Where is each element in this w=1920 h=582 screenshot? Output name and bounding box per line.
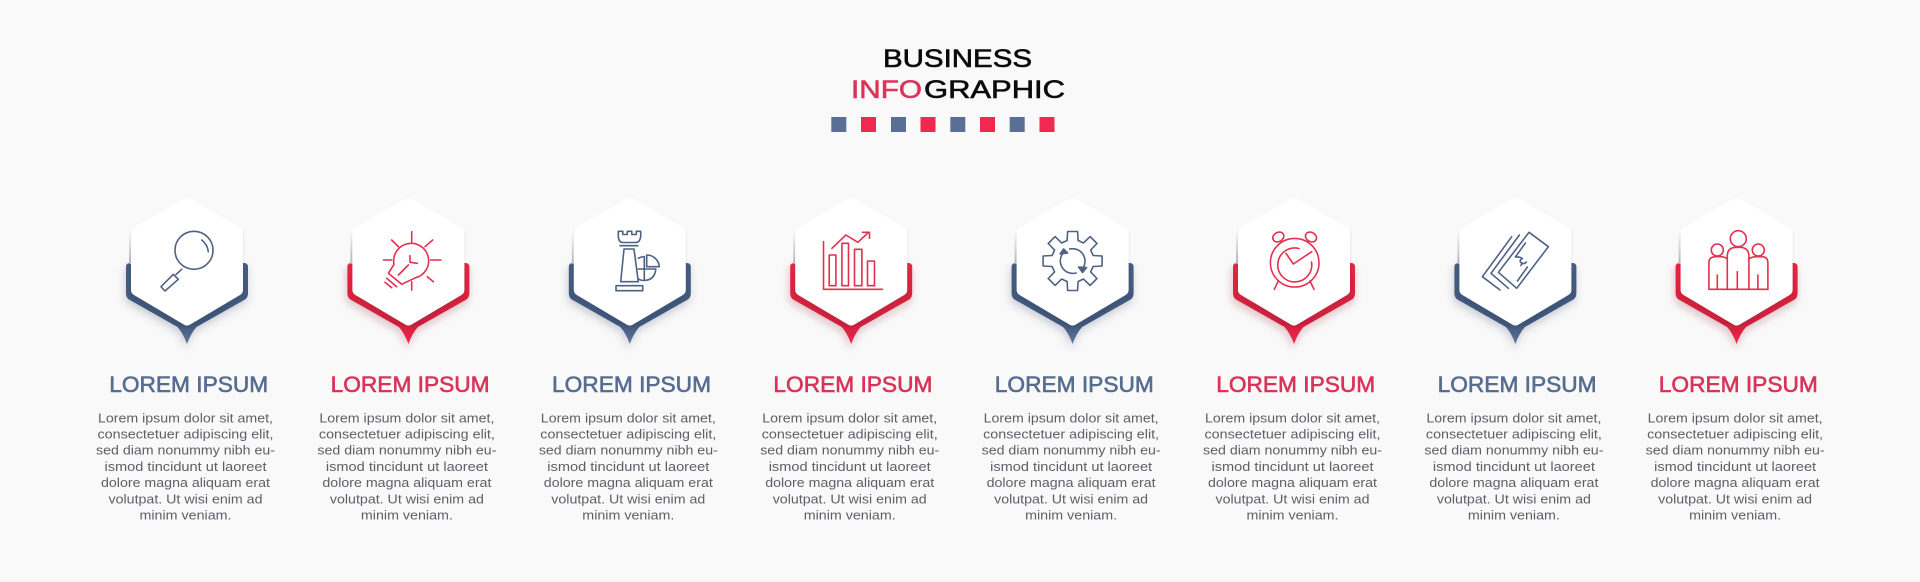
title: GRAPHIC — [924, 76, 1065, 104]
body text: consectetuer adipiscing elit, — [983, 426, 1159, 442]
body text: ismod tincidunt ut laoreet — [1654, 459, 1817, 474]
body text: minim veniam. — [804, 508, 896, 523]
body text: Lorem ipsum dolor sit amet, — [1426, 410, 1601, 425]
body text: volutpat. Ut wisi enim ad — [330, 491, 484, 506]
body text: dolore magna aliquam erat — [1429, 475, 1599, 490]
heading: LOREM IPSUM — [773, 372, 932, 397]
icon: chess rook with pie chart — [616, 231, 659, 291]
body text: ismod tincidunt ut laoreet — [104, 459, 267, 474]
body text: sed diam nonummy nibh eu- — [1203, 443, 1382, 458]
title: BUSINESS — [883, 45, 1032, 73]
body text — [1203, 410, 1382, 523]
panel: step 5 — [982, 198, 1161, 523]
body text: ismod tincidunt ut laoreet — [990, 459, 1153, 474]
body text: consectetuer adipiscing elit, — [319, 426, 495, 442]
body text: minim veniam. — [1689, 508, 1781, 523]
body text — [96, 410, 275, 523]
body text: volutpat. Ut wisi enim ad — [1437, 491, 1591, 506]
body text: sed diam nonummy nibh eu- — [317, 443, 496, 458]
body text — [1646, 410, 1825, 523]
body text: Lorem ipsum dolor sit amet, — [98, 410, 273, 425]
panel: step 6 — [1203, 198, 1382, 523]
body text: minim veniam. — [361, 508, 453, 523]
title: INFO — [851, 76, 922, 104]
body text: dolore magna aliquam erat — [987, 475, 1156, 490]
body text: minim veniam. — [1468, 508, 1560, 523]
body text: Lorem ipsum dolor sit amet, — [1205, 410, 1380, 425]
title — [851, 45, 1065, 104]
body text: ismod tincidunt ut laoreet — [1433, 459, 1595, 474]
panel: step 8 — [1646, 198, 1825, 523]
icon: group of people — [1709, 231, 1768, 289]
body text — [982, 410, 1161, 523]
panel: step 7 — [1424, 198, 1603, 523]
heading: LOREM IPSUM — [552, 372, 711, 397]
heading: LOREM IPSUM — [1659, 372, 1818, 397]
body text: Lorem ipsum dolor sit amet, — [984, 410, 1159, 425]
body text: ismod tincidunt ut laoreet — [326, 459, 488, 474]
body text: ismod tincidunt ut laoreet — [1212, 459, 1374, 474]
body text: sed diam nonummy nibh eu- — [760, 443, 939, 458]
body text: Lorem ipsum dolor sit amet, — [1648, 410, 1823, 425]
body text: sed diam nonummy nibh eu- — [96, 443, 275, 458]
body text: volutpat. Ut wisi enim ad — [1658, 491, 1812, 506]
body text: dolore magna aliquam erat — [765, 475, 935, 490]
body text: Lorem ipsum dolor sit amet, — [319, 410, 494, 425]
body text: consectetuer adipiscing elit, — [540, 426, 716, 442]
icon: banknotes — [1482, 232, 1548, 290]
panel: step 1 — [96, 198, 275, 523]
body text: volutpat. Ut wisi enim ad — [1216, 491, 1370, 506]
body text: dolore magna aliquam erat — [101, 475, 270, 490]
body text — [1424, 410, 1603, 523]
body text: minim veniam. — [140, 508, 232, 523]
body text: sed diam nonummy nibh eu- — [982, 443, 1161, 458]
panel: step 3 — [539, 198, 718, 523]
icon: light bulb with clock — [383, 232, 441, 290]
body text — [317, 410, 496, 523]
heading: LOREM IPSUM — [995, 372, 1154, 397]
heading: LOREM IPSUM — [1216, 372, 1375, 397]
body text: consectetuer adipiscing elit, — [1204, 426, 1380, 442]
body text: sed diam nonummy nibh eu- — [1646, 443, 1825, 458]
heading: LOREM IPSUM — [331, 372, 490, 397]
body text: volutpat. Ut wisi enim ad — [108, 491, 262, 506]
body text: Lorem ipsum dolor sit amet, — [541, 410, 716, 425]
body text: dolore magna aliquam erat — [1651, 475, 1820, 490]
body text: consectetuer adipiscing elit, — [1426, 426, 1602, 442]
body text — [760, 410, 939, 523]
body text: volutpat. Ut wisi enim ad — [994, 491, 1148, 506]
body text: ismod tincidunt ut laoreet — [547, 459, 710, 474]
decorative square row — [831, 117, 1054, 132]
body text: dolore magna aliquam erat — [322, 475, 492, 490]
body text: minim veniam. — [1025, 508, 1117, 523]
body text — [539, 410, 718, 523]
body text: consectetuer adipiscing elit, — [1647, 426, 1823, 442]
body text: minim veniam. — [582, 508, 674, 523]
icon: bar chart with rising arrow — [824, 232, 882, 289]
body text: consectetuer adipiscing elit, — [762, 426, 938, 442]
body text: minim veniam. — [1246, 508, 1338, 523]
body text: volutpat. Ut wisi enim ad — [551, 491, 705, 506]
body text: sed diam nonummy nibh eu- — [539, 443, 718, 458]
body text: volutpat. Ut wisi enim ad — [773, 491, 927, 506]
icon: gear with cycle arrows — [1043, 232, 1102, 290]
body text: sed diam nonummy nibh eu- — [1424, 443, 1603, 458]
body text: Lorem ipsum dolor sit amet, — [762, 410, 937, 425]
heading: LOREM IPSUM — [109, 372, 268, 397]
icon: alarm clock — [1270, 230, 1319, 289]
body text: consectetuer adipiscing elit, — [98, 426, 274, 442]
panel: step 2 — [317, 198, 496, 523]
heading: LOREM IPSUM — [1438, 372, 1597, 397]
icon: magnifying glass — [161, 231, 213, 291]
body text: dolore magna aliquam erat — [1208, 475, 1377, 490]
body text: ismod tincidunt ut laoreet — [769, 459, 931, 474]
body text: dolore magna aliquam erat — [544, 475, 713, 490]
panel: step 4 — [760, 198, 939, 523]
